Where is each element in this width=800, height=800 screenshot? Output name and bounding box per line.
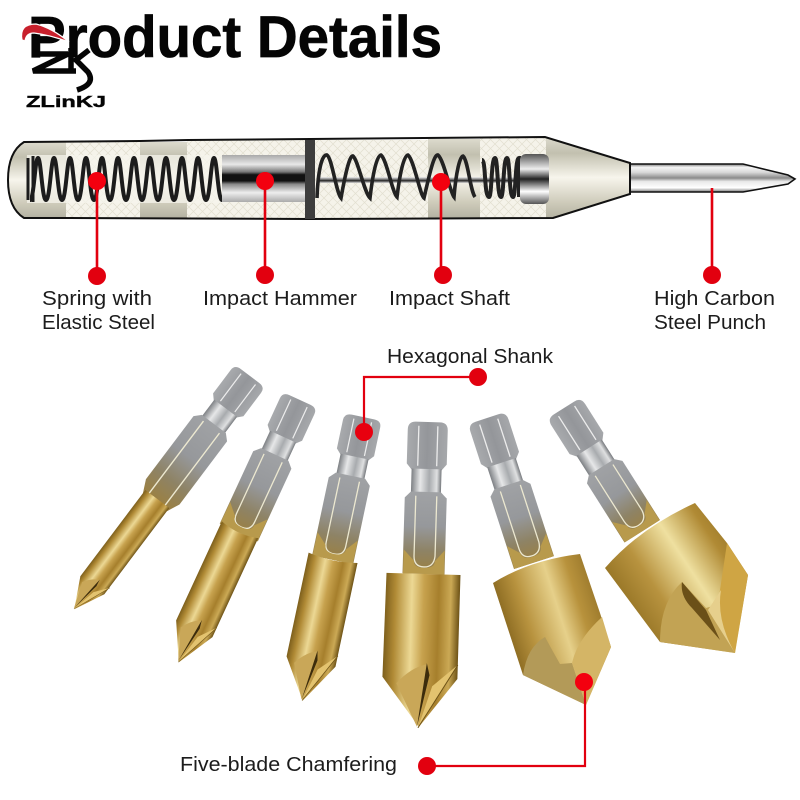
knurled grip right bbox=[480, 138, 548, 218]
body outline bbox=[8, 137, 630, 219]
logo wordmark: ZLinKJ bbox=[26, 94, 106, 111]
tight spring coils bbox=[482, 158, 519, 197]
bit 5 right cutting face bbox=[572, 617, 611, 705]
divider bar bbox=[305, 140, 315, 219]
smooth band middle bbox=[140, 142, 188, 218]
bit 6 side blade bbox=[719, 543, 748, 653]
callout: hexagonal shank: Hexagonal Shank bbox=[387, 346, 554, 368]
logo swoosh: red bbox=[22, 24, 69, 42]
countersink bit 3 bbox=[278, 412, 388, 706]
shaft end cap bbox=[520, 154, 549, 204]
pin bbox=[630, 164, 795, 192]
spring window bbox=[27, 155, 222, 203]
countersink bit 4 bbox=[381, 421, 465, 729]
bit 6 shank bbox=[546, 397, 660, 543]
knurled grip centre bbox=[187, 140, 429, 219]
cone bbox=[546, 137, 630, 218]
center punch illustration bbox=[8, 137, 795, 219]
logo: ZLinKJ bbox=[22, 24, 106, 111]
impact shaft bbox=[318, 177, 518, 183]
end cap and smooth bands bbox=[9, 142, 66, 218]
bit 6 dark notch bbox=[682, 582, 720, 640]
callout: five-blade chamfering: Five-blade Chamfering bbox=[180, 754, 397, 776]
impact hammer bbox=[222, 155, 305, 202]
bit 5 left cutting face bbox=[523, 637, 586, 705]
bit 6 head bbox=[605, 503, 748, 653]
spring end coils bbox=[28, 156, 33, 202]
bit 5 head bbox=[493, 554, 611, 705]
callout: impact hammer: Impact Hammer bbox=[203, 288, 357, 310]
callout: impact shaft: Impact Shaft bbox=[389, 288, 510, 310]
smooth band right bbox=[428, 139, 481, 218]
callout: impact hammer bbox=[203, 172, 357, 310]
callout: high carbon steel punch: High Carbon bbox=[654, 288, 775, 310]
knurled grip left bbox=[66, 141, 141, 219]
spring with elastic steel bbox=[30, 154, 222, 204]
bit 6 blade highlight bbox=[708, 590, 735, 653]
callout: high carbon steel punch: Steel Punch bbox=[654, 312, 766, 334]
logo mark: black Z and K strokes bbox=[33, 48, 90, 90]
callout: spring with elastic steel: Elastic Steel bbox=[42, 312, 155, 334]
callout: impact shaft bbox=[389, 173, 510, 310]
countersink bit 1 bbox=[57, 363, 267, 622]
callout: five-blade chamfering bbox=[180, 673, 593, 776]
title: Product Details bbox=[28, 5, 442, 70]
countersink bit 2 bbox=[160, 391, 319, 671]
bit 5 shank bbox=[467, 412, 554, 569]
countersink bit 6 bbox=[546, 397, 748, 653]
callout: spring with elastic steel bbox=[42, 172, 155, 334]
callout: hexagonal shank bbox=[355, 346, 554, 441]
punch body silhouette bbox=[8, 142, 546, 218]
shaft spring bbox=[317, 155, 475, 198]
countersink bit 5 bbox=[467, 412, 611, 705]
callout: high carbon steel punch bbox=[654, 188, 775, 334]
bit 6 lower cutting face bbox=[660, 582, 735, 653]
callout: spring with elastic steel: Spring with bbox=[42, 288, 152, 310]
